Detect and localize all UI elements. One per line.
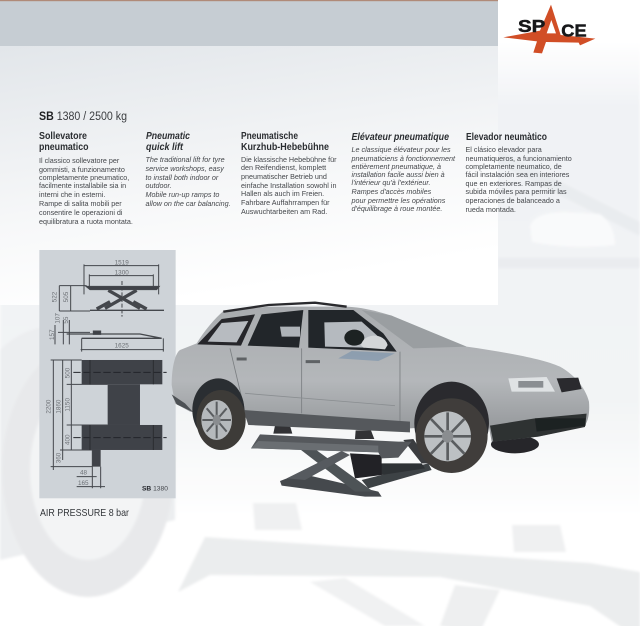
column: Italian: interni che in esterni. [39, 190, 105, 199]
column: Italian: Sollevatore [39, 130, 87, 142]
roof and rail [223, 303, 347, 312]
column: English: to install both indoor or [146, 173, 219, 182]
column: German: Fahrbare Auffahrrampen für [241, 198, 330, 207]
column: English: allow on the car balancing. [146, 199, 231, 208]
lower sill [243, 410, 410, 432]
dimension labels: 165 [78, 480, 89, 487]
door lines and handles [230, 348, 400, 423]
column: German: Auswuchtarbeiten am Rad. [241, 207, 327, 216]
dimension labels: 1625 [115, 342, 129, 349]
column: French: Le classique élévateur pour les [352, 145, 451, 154]
dimension labels: 1860 [56, 399, 63, 414]
column: Italian: facilmente installabile sia in [39, 181, 126, 190]
side view of lowered lift [55, 320, 164, 352]
far front tyre [491, 435, 539, 453]
plan view dimension lines [51, 360, 167, 488]
column: English: Mobile run-up ramps to [146, 190, 219, 199]
dimension labels: 48 [80, 469, 88, 476]
column: German: Die klassische Hebebühne für [241, 155, 337, 164]
column: French: d'équilibrage à roue montée. [352, 204, 442, 213]
front bumper [490, 414, 587, 442]
dimension labels: 107 [54, 313, 61, 324]
column: German: Pneumatische [241, 130, 298, 142]
column: French [350, 131, 456, 213]
column: French: Elévateur pneumatique [352, 131, 449, 143]
windows [197, 310, 397, 352]
column: Spanish: completamente neumatico, de [466, 162, 562, 171]
plan view of the platforms [82, 360, 162, 467]
dimension labels [46, 259, 129, 487]
air pressure label: AIR PRESSURE 8 bar [40, 507, 129, 519]
title: SB 1380 / 2500 kg [39, 111, 127, 123]
column: German [241, 130, 337, 216]
column: Italian: gommisti, a funzionamento [39, 165, 125, 174]
column: Spanish: El clásico elevador para [466, 145, 542, 154]
dimension labels: 55 [63, 316, 70, 324]
column: English: service workshops, easy [146, 164, 224, 173]
headlight and grille [508, 377, 555, 392]
column: Spanish: subida móviles para permitir las [466, 187, 567, 196]
column: German: Kurzhub-Hebebühne [241, 141, 329, 153]
column: Italian: equilibratura a ruota montata. [39, 217, 133, 226]
dimension labels: 1519 [115, 259, 129, 266]
column: Spanish: que en exteriores. Rampas de [466, 179, 562, 188]
column: French: Rampes d'accès mobiles [352, 187, 432, 196]
side elevation of the lift [59, 264, 164, 317]
column: Spanish: neumatiqueros, a funcionamiento [466, 154, 572, 163]
logo: SPACE: SP [518, 16, 545, 36]
column: French: entièrement pneumatique, à [352, 162, 441, 171]
scissor lift [251, 426, 432, 497]
mirror [361, 336, 388, 349]
column: Spanish: Elevador neumàtico [466, 131, 547, 143]
column: French: pneumaticiens à fonctionnement [350, 154, 456, 163]
rear wheel [192, 378, 246, 450]
column: Italian: completamente pneumatico, [39, 173, 129, 182]
column: English: outdoor. [146, 181, 172, 190]
dimension labels: 400 [64, 434, 71, 445]
logo: SPACE: CE [561, 21, 587, 41]
front wheel [414, 382, 489, 473]
column: German: den Reifendienst, komplett [241, 163, 326, 172]
column: Spanish: operaciones de balanceado a [466, 196, 560, 205]
column: Spanish: rueda montada. [466, 205, 516, 214]
column: English: quick lift [146, 141, 183, 153]
column: Italian: consentire le operazioni di [39, 208, 123, 217]
column: Italian [39, 130, 133, 226]
dimension labels: 522 [52, 291, 59, 302]
logo: SPACE [503, 5, 595, 53]
column: English [146, 130, 231, 208]
model tag: SB 1380 [142, 486, 168, 493]
text panel [0, 46, 498, 305]
dimension labels: 1150 [64, 398, 71, 412]
dimension labels: 1300 [115, 269, 129, 276]
column: German: einfache Installation sowohl in [241, 181, 336, 190]
dimension labels: 505 [63, 291, 70, 302]
column: English: Pneumatic [146, 130, 190, 142]
lift and car photo [172, 303, 589, 497]
dimension labels: 360 [56, 452, 63, 463]
dimension labels: 157 [49, 329, 56, 340]
top grey header bar [0, 0, 498, 46]
dimension labels: 2200 [46, 399, 53, 414]
column: Italian: Rampe di salita mobili per [39, 199, 122, 208]
technical drawing panel [39, 250, 176, 498]
car body [172, 307, 589, 442]
column: French: pour permettre les opérations [350, 196, 446, 205]
column: German: pneumatischer Betrieb und [241, 172, 327, 181]
column: Italian: Il classico sollevatore per [39, 156, 120, 165]
column: German: Hallen als auch im Freien. [241, 189, 324, 198]
column: English: The traditional lift for tyre [146, 155, 225, 164]
dimension labels: 500 [64, 367, 71, 378]
column: Spanish: fácil instalación sea en interiores [466, 170, 570, 179]
column: French: installation facile aussi bien à [352, 170, 445, 179]
column: Spanish [466, 131, 572, 214]
column: French: l'intérieur qu'à l'extérieur. [352, 178, 430, 187]
column: Italian: pneumatico [39, 141, 88, 153]
